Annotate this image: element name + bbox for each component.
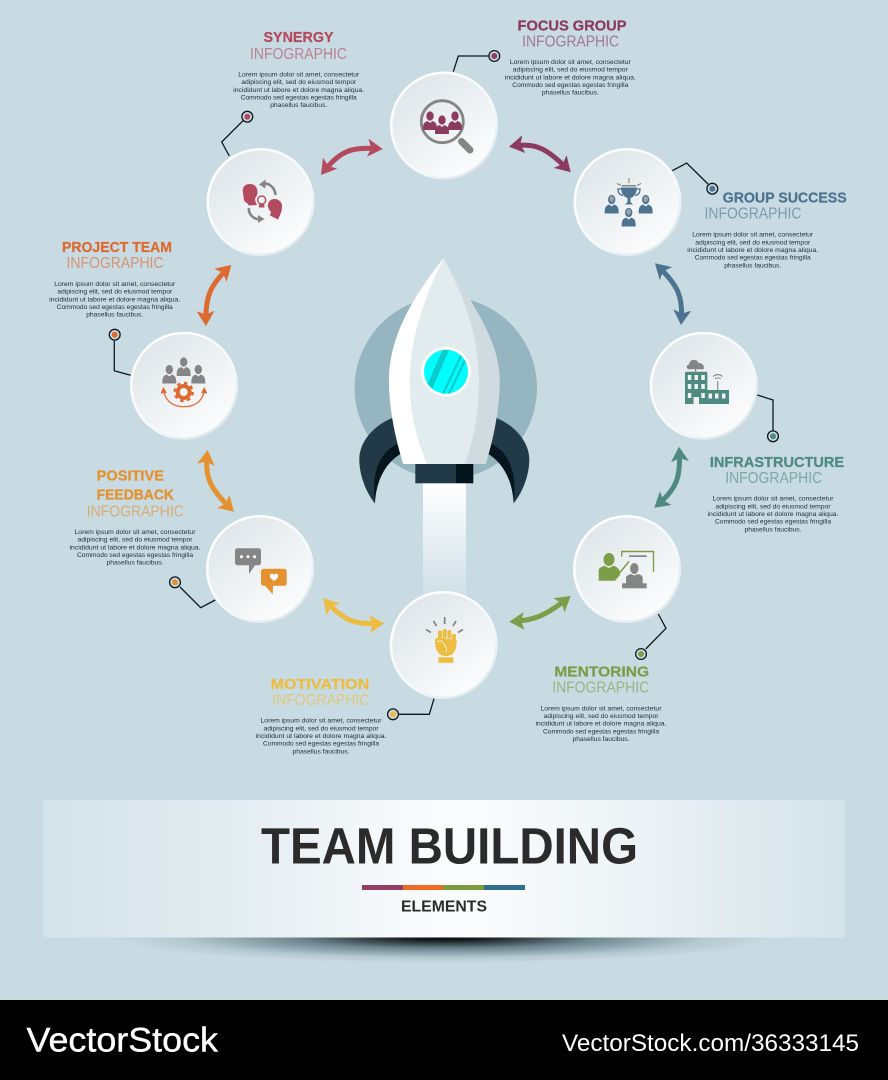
text block: infrastructure: phasellus faucibus.: [744, 526, 802, 533]
text block: focus group: adipiscing elit, sed do eiusmod tempor: [513, 67, 629, 74]
text block: motivation: incididunt ut labore et dolore magna aliqua.: [256, 733, 387, 740]
text block: positive feedback: Lorem ipsum dolor sit amet, consectetur: [74, 529, 196, 536]
heading: positive feedback: POSITIVE: [97, 468, 164, 485]
panel: positive feedback: [70, 468, 314, 623]
arrow: positive feedback to project team: [207, 450, 234, 512]
text block: positive feedback: Commodo sed egestas egestas fringilla: [77, 552, 193, 559]
panel: title banner: [43, 800, 845, 963]
text block: mentoring: [536, 705, 667, 743]
subheading: synergy: INFOGRAPHIC: [250, 46, 347, 63]
arrow: mentoring to motivation: [509, 596, 571, 622]
text block: positive feedback: incididunt ut labore et dolore magna aliqua.: [70, 544, 201, 551]
text block: motivation: Commodo sed egestas egestas fringilla: [263, 741, 379, 748]
subtitle: ELEMENTS: [401, 898, 487, 916]
rocket backdrop circle: [355, 297, 537, 479]
colour bar: [362, 885, 525, 890]
icon: mentoring teacher and student: [599, 552, 654, 588]
text block: group success: adipiscing elit, sed do eiusmod tempor: [695, 239, 811, 246]
heading: motivation: MOTIVATION: [271, 676, 369, 693]
text block: synergy: [233, 72, 364, 109]
panel: synergy: [206, 29, 364, 256]
text block: synergy: incididunt ut labore et dolore magna aliqua.: [233, 87, 364, 94]
icon: project team people and gear: [160, 357, 208, 407]
text block: focus group: [505, 59, 636, 97]
connector: positive feedback: [170, 577, 215, 608]
text block: synergy: phasellus faucibus.: [270, 102, 327, 109]
panel: infrastructure: [650, 332, 844, 533]
subheading: positive feedback: INFOGRAPHIC: [87, 503, 184, 520]
subheading: focus group: INFOGRAPHIC: [522, 34, 619, 51]
right fin: [487, 418, 529, 504]
subheading: infrastructure: INFOGRAPHIC: [725, 470, 822, 487]
text block: group success: incididunt ut labore et dolore magna aliqua.: [687, 247, 818, 254]
banner background: [43, 800, 845, 938]
footer url text: VectorStock.com/36333145: [562, 1030, 859, 1057]
banner shadow: [143, 938, 744, 960]
circle: infrastructure: [650, 332, 758, 440]
rocket: [355, 258, 537, 595]
text block: synergy: Lorem ipsum dolor sit amet, consectetur: [238, 72, 360, 78]
text block: infrastructure: Lorem ipsum dolor sit amet, consectetur: [712, 496, 834, 503]
arrow: focus group to group success: [509, 145, 571, 172]
rocket body: [389, 258, 500, 464]
heading: positive feedback: FEEDBACK: [97, 487, 174, 504]
text block: positive feedback: adipiscing elit, sed do eiusmod tempor: [77, 537, 193, 544]
circle: group success: [574, 148, 682, 256]
text block: project team: adipiscing elit, sed do eiusmod tempor: [57, 289, 173, 296]
text block: focus group: Lorem ipsum dolor sit amet, consectetur: [510, 59, 632, 66]
text block: project team: incididunt ut labore et dolore magna aliqua.: [49, 296, 180, 303]
rocket exhaust trail: [423, 483, 466, 595]
circle: project team: [130, 332, 238, 440]
subheading: project team: INFOGRAPHIC: [66, 255, 164, 272]
text block: synergy: adipiscing elit, sed do eiusmod tempor: [241, 79, 357, 86]
text block: focus group: Commodo sed egestas egestas fringilla: [512, 82, 629, 89]
subheading: mentoring: INFOGRAPHIC: [552, 680, 649, 697]
text block: project team: phasellus faucibus.: [86, 312, 143, 319]
footer logo text: VectorStock: [26, 1022, 219, 1060]
text block: project team: Lorem ipsum dolor sit amet, consectetur: [54, 281, 176, 288]
connector: infrastructure: [757, 395, 778, 442]
panel: mentoring: [536, 515, 681, 743]
heading: mentoring: MENTORING: [554, 664, 649, 681]
footer bar: [0, 1000, 888, 1080]
text block: motivation: adipiscing elit, sed do eiusmod tempor: [263, 725, 379, 732]
circle: synergy: [206, 148, 314, 256]
heading: focus group: FOCUS GROUP: [518, 18, 626, 35]
connector: mentoring: [636, 614, 666, 659]
panel: project team: [49, 239, 238, 440]
arrow: group success to infrastructure: [655, 263, 682, 325]
heading: positive feedback: [97, 468, 174, 504]
heading: infrastructure: INFRASTRUCTURE: [710, 454, 844, 471]
text block: mentoring: phasellus faucibus.: [572, 736, 630, 743]
arrow: motivation to positive feedback: [323, 598, 384, 624]
text block: motivation: Lorem ipsum dolor sit amet, consectetur: [260, 718, 382, 725]
text block: mentoring: Commodo sed egestas egestas fringilla: [543, 728, 659, 735]
text block: mentoring: Lorem ipsum dolor sit amet, consectetur: [540, 705, 662, 712]
icon: group success trophy and people: [605, 178, 653, 226]
icon: focus group magnifier: [421, 101, 470, 150]
rocket window: [421, 345, 471, 398]
text block: project team: Commodo sed egestas egestas fringilla: [57, 304, 173, 311]
connector: group success: [672, 163, 718, 194]
text block: positive feedback: phasellus faucibus.: [106, 560, 164, 567]
arrow: infrastructure to mentoring: [654, 447, 679, 508]
text block: project team: [49, 281, 180, 319]
text block: group success: [687, 232, 818, 269]
icon: synergy heads and bulb: [243, 180, 282, 223]
text block: group success: Lorem ipsum dolor sit amet, consectetur: [692, 232, 814, 239]
icon: positive feedback speech bubbles: [235, 548, 287, 594]
heading: project team: PROJECT TEAM: [62, 239, 172, 256]
icon: infrastructure building: [685, 360, 729, 404]
text block: group success: phasellus faucibus.: [724, 262, 781, 269]
main title: TEAM BUILDING: [261, 818, 638, 874]
connector: motivation: [388, 699, 434, 720]
text block: focus group: phasellus faucibus.: [542, 90, 599, 97]
text block: synergy: Commodo sed egestas egestas fringilla: [241, 94, 357, 102]
rocket engine base: [415, 464, 473, 483]
text block: motivation: [256, 718, 387, 755]
arrow: synergy to focus group: [321, 148, 383, 175]
panel: group success: [574, 148, 847, 269]
text block: infrastructure: Commodo sed egestas egestas fringilla: [715, 519, 831, 526]
connector: focus group: [453, 51, 500, 72]
arrow: project team to synergy: [206, 265, 231, 326]
panel: focus group: [390, 18, 636, 180]
connector: project team: [109, 329, 131, 375]
circle: focus group: [390, 72, 498, 180]
subheading: group success: INFOGRAPHIC: [704, 206, 802, 223]
text block: motivation: phasellus faucibus.: [292, 748, 350, 755]
text block: positive feedback: [70, 529, 201, 567]
circle: motivation: [390, 591, 498, 699]
text block: infrastructure: adipiscing elit, sed do eiusmod tempor: [715, 503, 831, 510]
text block: infrastructure: incididunt ut labore et dolore magna aliqua.: [708, 511, 839, 518]
circle: positive feedback: [206, 515, 314, 623]
left fin: [359, 418, 402, 504]
text block: focus group: incididunt ut labore et dolore magna aliqua.: [505, 74, 636, 81]
connector: synergy: [222, 111, 253, 156]
circle: mentoring: [573, 515, 681, 623]
icon: motivation fist: [426, 617, 463, 663]
panel: motivation: [256, 591, 498, 755]
text block: infrastructure: [708, 496, 839, 533]
heading: synergy: SYNERGY: [264, 29, 334, 46]
text block: group success: Commodo sed egestas egestas fringilla: [695, 255, 811, 262]
heading: group success: GROUP SUCCESS: [723, 190, 847, 207]
text block: mentoring: incididunt ut labore et dolore magna aliqua.: [536, 721, 667, 728]
text block: mentoring: adipiscing elit, sed do eiusmod tempor: [543, 713, 659, 720]
subheading: motivation: INFOGRAPHIC: [272, 692, 369, 709]
